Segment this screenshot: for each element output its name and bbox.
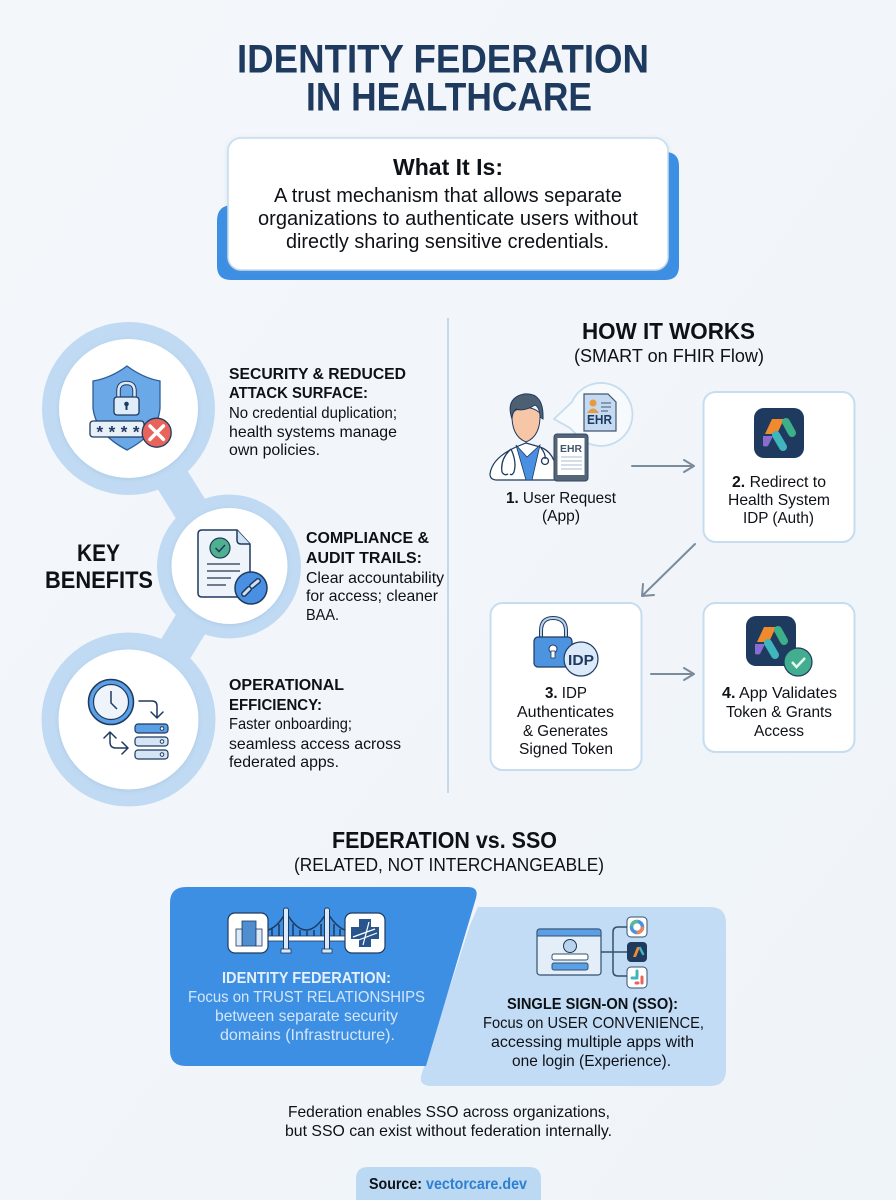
sso text: Focus on USER CONVENIENCE, [483,1015,704,1032]
step 3 label: 3. IDP [545,685,587,702]
icon: speech bubble with EHR record [554,383,632,446]
definition text: directly sharing sensitive credentials. [286,231,609,253]
benefit: operational efficiency [229,677,401,771]
icon: app logo with check badge [746,616,812,676]
benefit: security: No credential duplication; [229,405,397,422]
step 2 label: Health System [728,492,830,509]
title: IDENTITY FEDERATION [237,38,649,82]
closing note: Federation enables SSO across organizations, [288,1104,610,1121]
benefit: compliance: for access; cleaner [306,588,439,605]
federation text: domains (Infrastructure). [220,1027,395,1044]
source pill [356,1167,541,1200]
icon: clock and server [58,650,198,790]
source pill: Source: [369,1176,422,1193]
benefit: security: ATTACK SURFACE: [229,385,368,402]
step 4 label: Access [754,723,804,740]
definition text: organizations to authenticate users without [258,208,638,230]
heading: how it works: (SMART on FHIR Flow) [574,346,764,366]
step 3 label: Authenticates [517,704,614,721]
benefit: operational efficiency: seamless access across [229,736,401,753]
step 2 label [728,474,830,527]
benefit: operational efficiency: federated apps. [229,754,339,771]
step 1 label: (App) [542,508,580,525]
icon: bridge between hospital and health system [228,908,385,953]
title [237,38,649,120]
benefit: security [229,366,406,459]
step 1 label [506,490,617,525]
heading: key benefits: KEY [77,540,120,567]
arrow: step 1 to 2 [632,460,694,472]
card: identity federation [170,887,477,1066]
benefit: compliance: AUDIT TRAILS: [306,550,422,567]
benefit: security: health systems manage [229,424,397,441]
federation text: Focus on TRUST RELATIONSHIPS [188,989,425,1006]
heading: what it is: What It Is: [393,154,503,180]
icon: shield with lock and rejected password: **** [96,422,140,442]
icon: doctor: EHR [560,443,582,455]
icon: app logo [754,408,804,458]
panel: what it is [217,138,679,280]
benefit: security: SECURITY & REDUCED [229,366,406,383]
arrow: step 3 to 4 [651,668,694,680]
closing note: but SSO can exist without federation internally. [285,1123,612,1140]
step 1: user request [490,383,632,525]
benefit: operational efficiency: OPERATIONAL [229,677,344,694]
benefit: compliance: COMPLIANCE & [306,530,429,547]
step 4 label: Token & Grants [726,704,832,721]
source pill: vectorcare.dev [426,1176,527,1193]
heading: federation vs sso: (RELATED, NOT INTERCHANGEABLE) [294,855,604,875]
benefit: security: own policies. [229,442,320,459]
icon: speech bubble with EHR record: EHR [587,413,612,427]
federation text: between separate security [215,1008,398,1025]
icon: lock with IDP badge [534,618,598,676]
benefit: operational efficiency: Faster onboarding; [229,716,352,733]
benefit: compliance [306,530,444,624]
heading: federation vs sso [294,827,604,875]
panel: how it works [490,318,854,770]
heading: how it works: HOW IT WORKS [582,318,755,344]
closing note [285,1104,612,1140]
definition text [258,185,638,253]
step 3 label [517,685,614,758]
benefit: compliance: BAA. [306,607,339,624]
title: IN HEALTHCARE [306,76,592,120]
federation text [188,970,425,1044]
arrow: step 2 to 3 [642,544,695,596]
step 3: authenticate [490,603,642,770]
sso text: one login (Experience). [512,1053,671,1070]
step 4 label [722,685,837,740]
step 4 label: 4. App Validates [722,685,837,702]
card: single sign-on [421,907,726,1086]
icon: compliance document with link [172,508,288,624]
heading: federation vs sso: FEDERATION vs. SSO [332,827,557,853]
benefit: operational efficiency: EFFICIENCY: [229,697,322,714]
federation text: IDENTITY FEDERATION: [222,970,391,987]
panel: federation vs sso [170,827,726,1086]
heading: how it works [574,318,764,366]
panel: key benefits [42,322,444,806]
icon: login window connected to apps [537,917,647,988]
step 3 label: & Generates [523,723,608,740]
benefit: compliance: Clear accountability [306,570,444,587]
step 2: redirect [704,392,854,542]
step 2 label: IDP (Auth) [743,510,814,527]
sso text: accessing multiple apps with [491,1034,694,1051]
heading: key benefits: BENEFITS [45,567,153,594]
step 1 label: 1. User Request [506,490,617,507]
step 3 label: Signed Token [519,741,613,758]
heading: key benefits [45,540,153,594]
icon: lock with IDP badge: IDP [568,652,594,669]
icon: shield with lock and rejected password [59,339,198,478]
icon: doctor [490,394,588,481]
step 4: validate [704,603,854,752]
definition text: A trust mechanism that allows separate [274,185,622,207]
sso text: SINGLE SIGN-ON (SSO): [507,996,678,1013]
sso text [483,996,704,1070]
step 2 label: 2. Redirect to [732,474,826,491]
